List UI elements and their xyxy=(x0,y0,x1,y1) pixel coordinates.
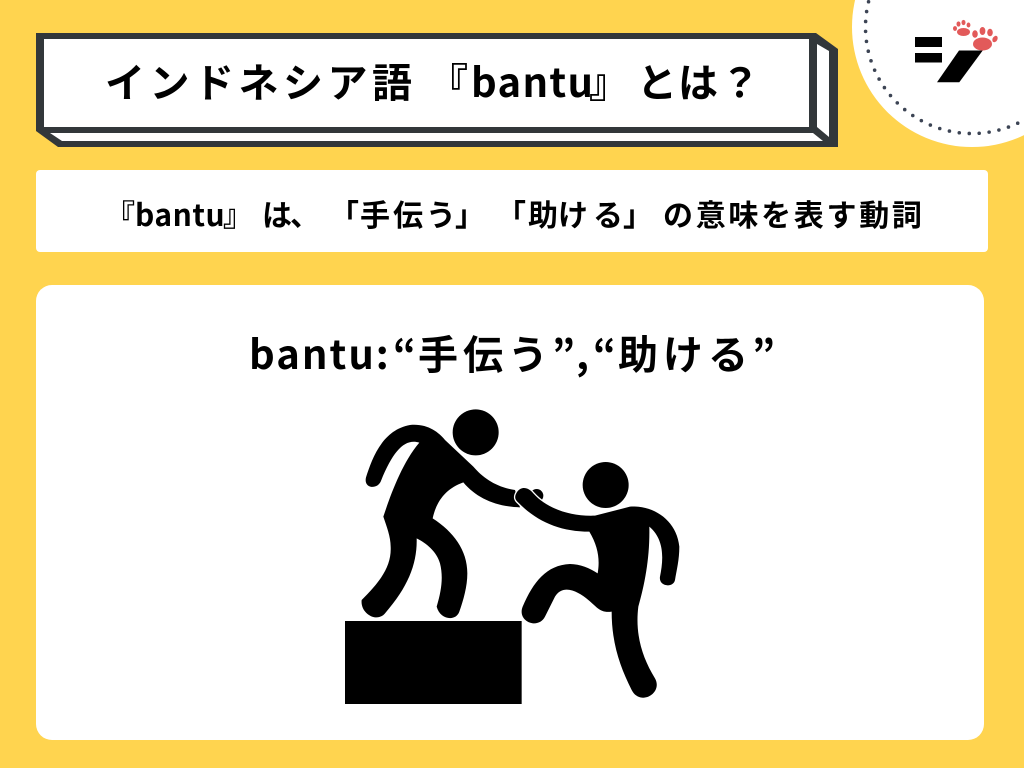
title xyxy=(105,51,760,109)
meaning heading: “ xyxy=(393,323,416,381)
definition text: う xyxy=(426,191,456,235)
helper person xyxy=(362,409,543,618)
meaning heading: 助ける xyxy=(618,323,753,381)
title: bantu xyxy=(471,51,594,109)
definition text: 手 xyxy=(360,191,390,235)
meaning heading: “ xyxy=(593,323,616,381)
definition text: 」 xyxy=(623,191,653,235)
meaning heading: 手伝う xyxy=(418,323,553,381)
title: は xyxy=(678,51,718,109)
definition text: bantu xyxy=(135,191,225,235)
definition text: 助 xyxy=(528,191,558,235)
title: インドネシア語 xyxy=(105,51,416,109)
definition text: 、 xyxy=(290,191,320,235)
panel: definition xyxy=(36,170,988,252)
definition text xyxy=(105,191,925,235)
meaning heading: , xyxy=(576,323,589,381)
climbing person xyxy=(515,462,679,698)
icon: paw prints xyxy=(953,20,999,50)
definition text: 」 xyxy=(455,191,485,235)
panel: meaning xyxy=(36,285,984,740)
meaning heading xyxy=(249,323,775,381)
meaning heading: ” xyxy=(752,323,775,381)
definition text: は xyxy=(262,191,292,235)
meaning heading: ” xyxy=(552,323,575,381)
step box xyxy=(345,621,522,704)
definition text: る xyxy=(593,191,623,235)
title: と xyxy=(637,51,677,109)
definition text: 『 xyxy=(105,191,135,235)
logo mark xyxy=(915,37,983,82)
meaning heading: bantu: xyxy=(249,323,391,381)
definition text: 「 xyxy=(329,191,359,235)
definition text: 伝 xyxy=(393,191,423,235)
title: ？ xyxy=(720,51,760,109)
definition text: の意味を表す動詞 xyxy=(663,191,925,235)
title: 』 xyxy=(589,51,629,109)
definition text: 「 xyxy=(496,191,526,235)
title: 『 xyxy=(428,51,468,109)
definition text: 』 xyxy=(223,191,253,235)
definition text: け xyxy=(558,191,588,235)
